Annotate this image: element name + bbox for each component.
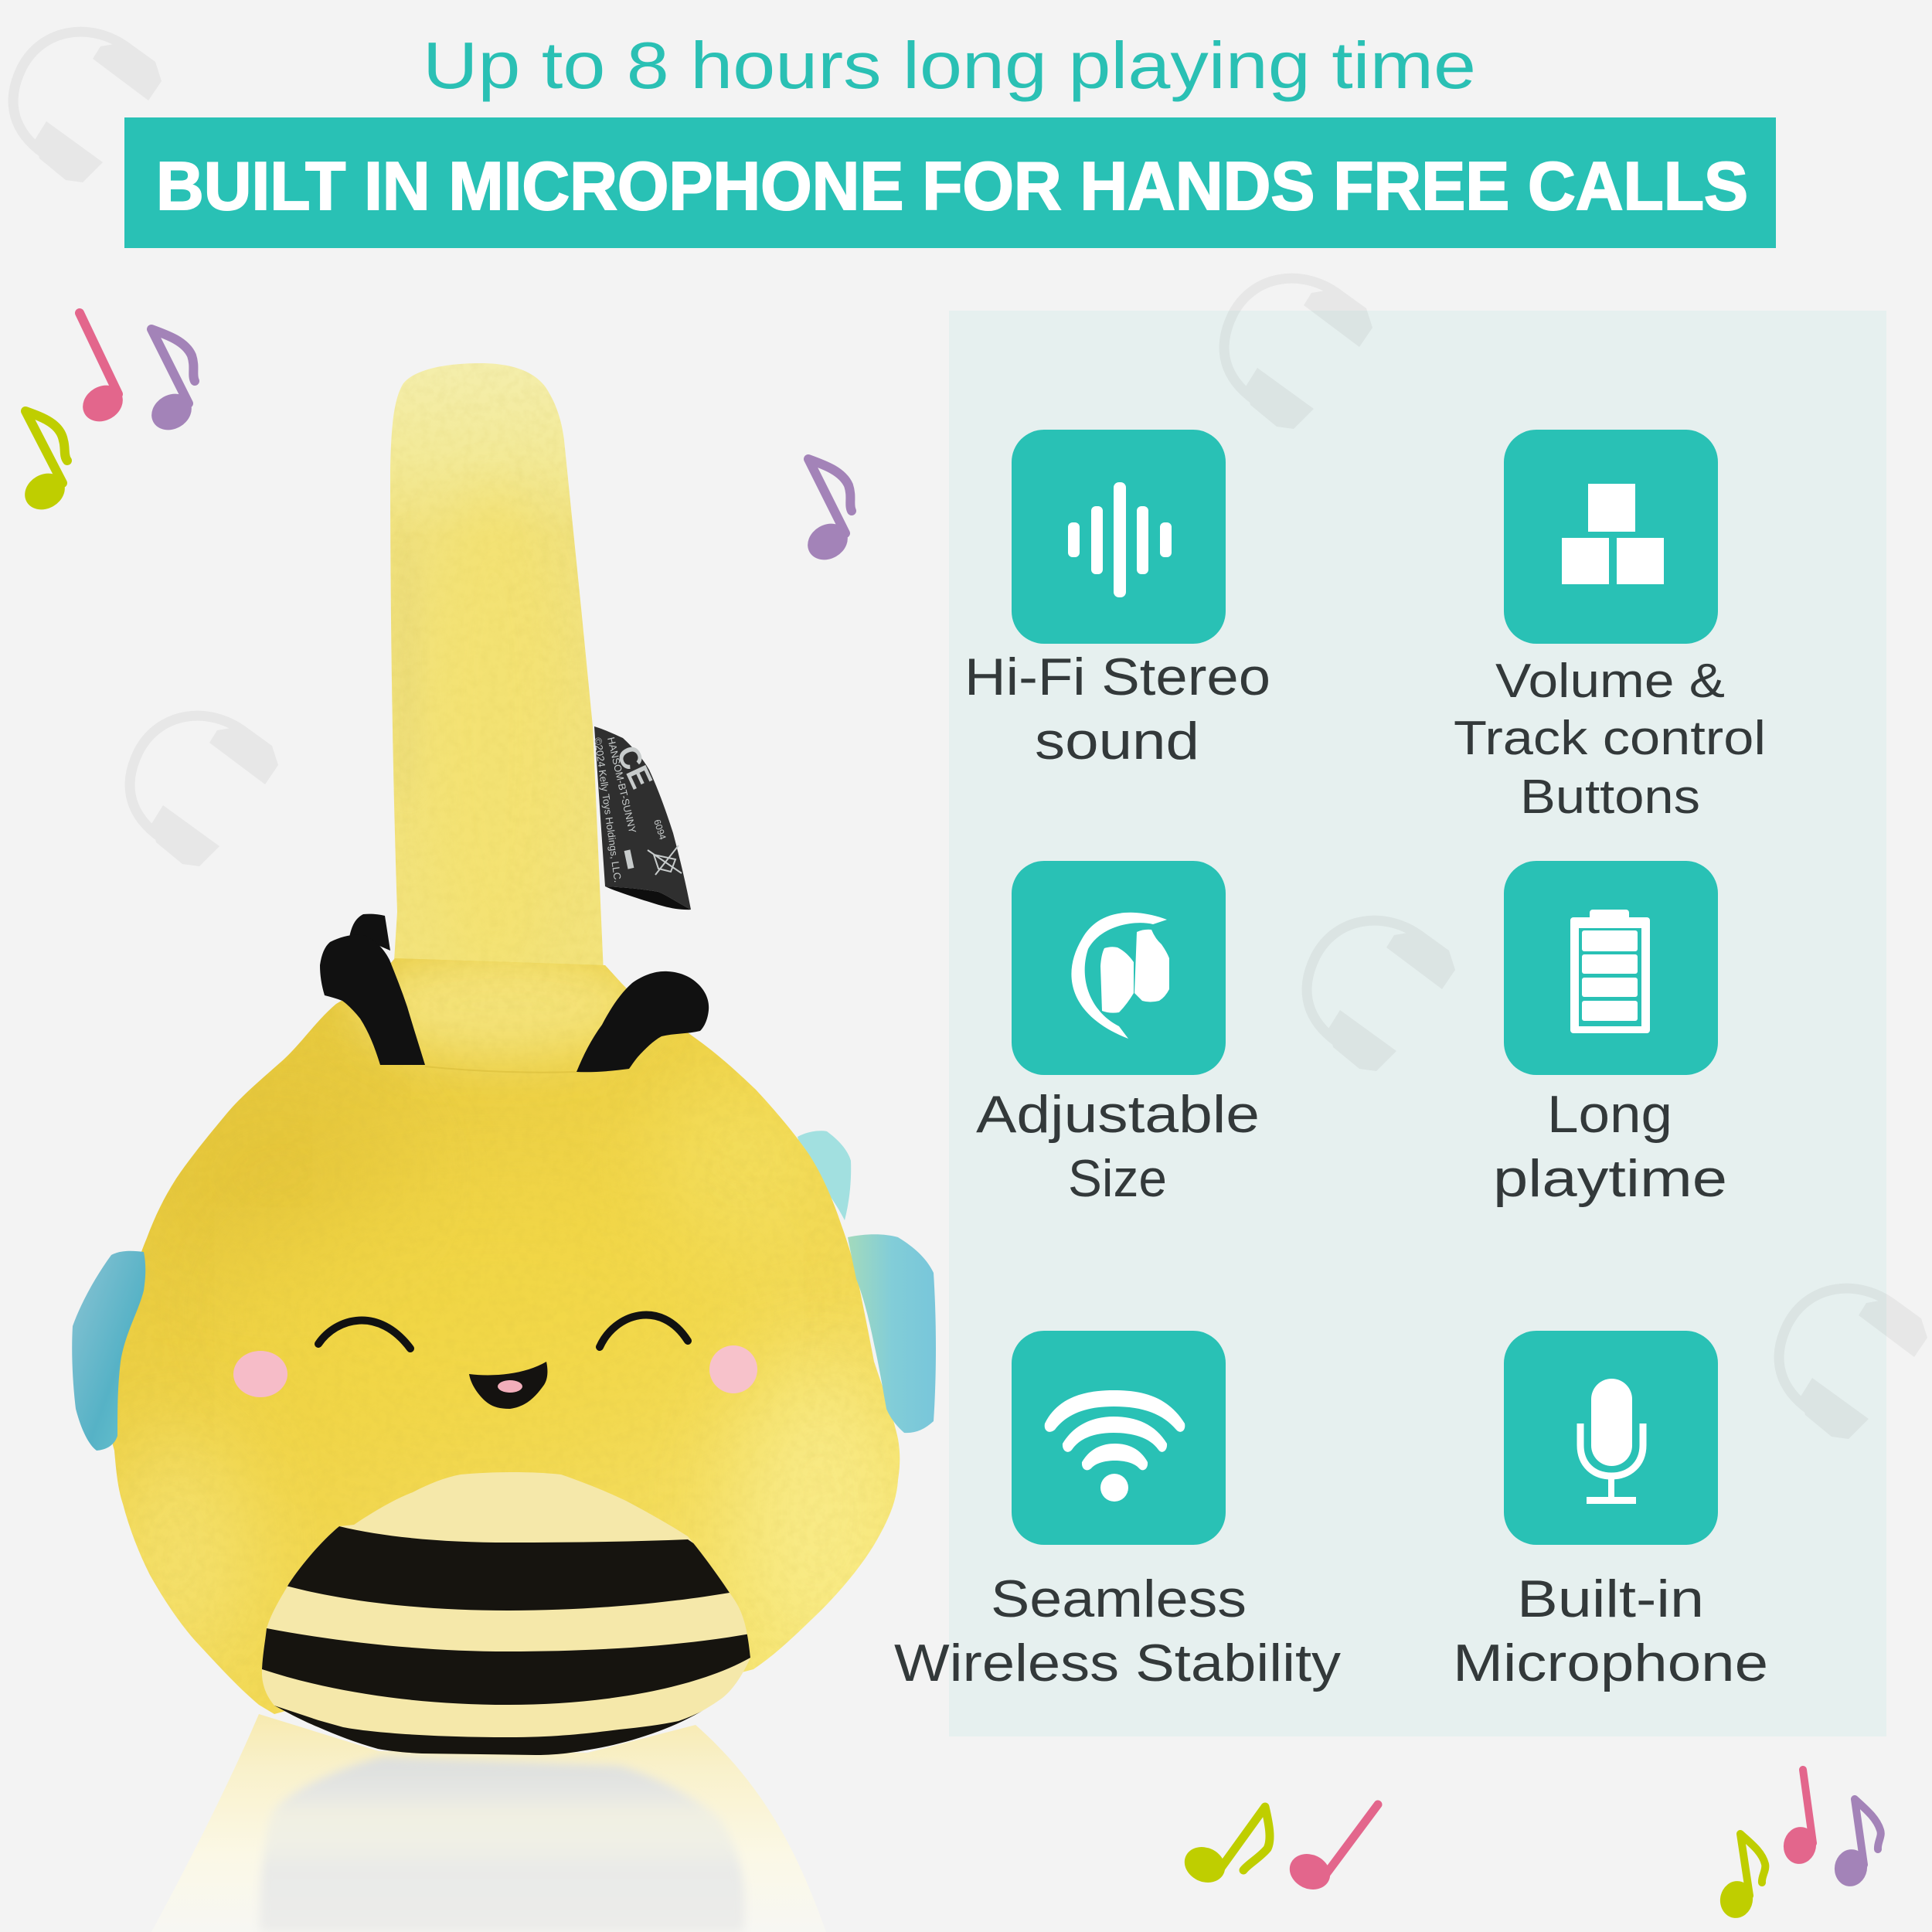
feature: Volume and track control — [1454, 430, 1766, 824]
icon: microphone — [1504, 1331, 1718, 1545]
face — [233, 1315, 757, 1409]
note: lime bottom right — [1717, 1834, 1765, 1920]
icon: blocks — [1504, 430, 1718, 644]
left ear cup — [72, 1251, 145, 1451]
title banner: BUILT IN MICROPHONE FOR HANDS FREE CALLS — [156, 148, 1748, 224]
label line 2: Wireless Stability — [894, 1634, 1341, 1692]
label: Volume & — [1495, 655, 1725, 708]
label: Long — [1547, 1085, 1672, 1144]
eye right — [600, 1315, 688, 1347]
plush bee headphones — [72, 363, 936, 1932]
note: purple top left — [145, 329, 198, 437]
blush right — [709, 1345, 757, 1393]
tag bin symbol — [648, 845, 682, 875]
eye left — [318, 1321, 410, 1349]
note: pink bottom left — [1284, 1804, 1378, 1896]
note: lime top left — [19, 411, 71, 517]
rear antenna — [349, 914, 390, 951]
note: lime bottom left — [1179, 1807, 1270, 1889]
belly stripes — [262, 1526, 750, 1755]
head seam — [425, 1066, 577, 1073]
head body — [93, 951, 912, 1754]
right ear cup — [848, 1234, 936, 1433]
note: pink bottom right — [1781, 1770, 1819, 1866]
tongue — [498, 1380, 522, 1393]
tag print: HANSOM-BT-SUNNY — [605, 736, 638, 835]
feature: Seamless wireless stability — [894, 1331, 1341, 1692]
title banner — [124, 117, 1776, 248]
label: Seamless — [991, 1570, 1247, 1628]
mouth — [469, 1362, 547, 1409]
tag print: ©2024 Kelly Toys Holdings, LLC. — [592, 736, 624, 883]
left antenna — [320, 935, 425, 1065]
tag print: 6094 — [651, 818, 668, 842]
label line 2: Microphone — [1453, 1634, 1768, 1692]
label line 2: Size — [1068, 1149, 1167, 1208]
tag print — [592, 736, 668, 883]
icon: sound wave — [1012, 430, 1226, 644]
icon: battery — [1504, 861, 1718, 1075]
headband — [390, 363, 604, 965]
feature: Adjustable size — [976, 861, 1260, 1208]
icon: wifi — [1012, 1331, 1226, 1545]
subtitle: Up to 8 hours long playing time — [423, 29, 1476, 103]
back ear cup — [798, 1131, 851, 1220]
label: Adjustable — [976, 1085, 1260, 1144]
blush left — [233, 1351, 287, 1397]
feature: Hi-Fi Stereo sound — [964, 430, 1270, 770]
label line 3: Buttons — [1520, 770, 1700, 824]
care tag — [592, 726, 691, 910]
belly — [261, 1472, 750, 1755]
right antenna — [577, 971, 709, 1072]
headphone watermarks — [13, 32, 1927, 1439]
feature: Long playtime — [1493, 861, 1727, 1208]
icon: headphones — [1012, 861, 1226, 1075]
note: pink top left — [77, 313, 129, 429]
feature: Built-in microphone — [1453, 1331, 1768, 1692]
label line 2: Track control — [1454, 712, 1766, 765]
note: purple bottom right — [1832, 1799, 1881, 1889]
floor reflection — [151, 1714, 826, 1932]
label line 2: playtime — [1493, 1149, 1727, 1208]
panel: features background — [949, 311, 1886, 1736]
label: Hi-Fi Stereo — [964, 648, 1270, 706]
label line 2: sound — [1035, 712, 1199, 770]
note: purple centre — [801, 459, 854, 567]
label: Built-in — [1517, 1570, 1704, 1628]
tag print: CE — [610, 740, 658, 794]
